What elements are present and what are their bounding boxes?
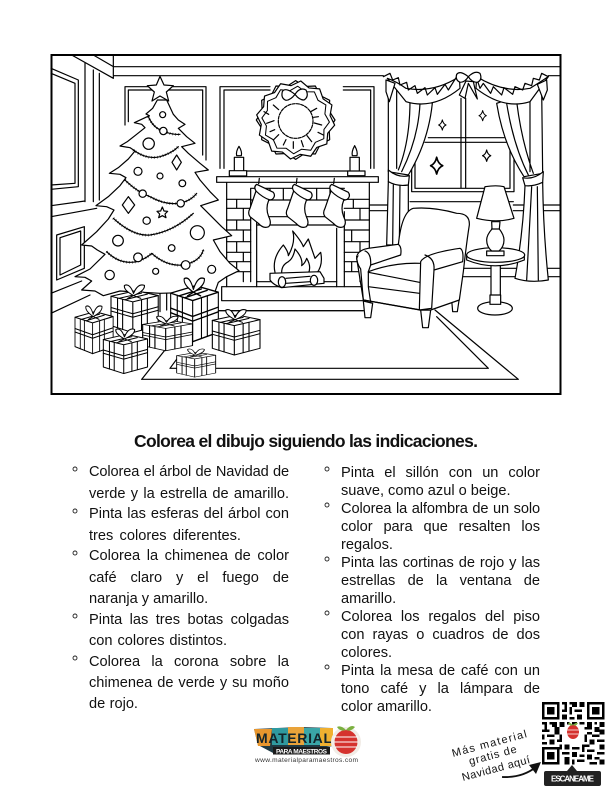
icon: apple <box>331 726 361 757</box>
instructions right column: Colorea los regalos del piso <box>341 609 540 625</box>
instructions right column: suave, como azul o beige. <box>341 483 511 499</box>
instructions right column: color amarillo. <box>341 699 432 715</box>
instructions right column: Colorea la alfombra de un solo <box>341 501 540 517</box>
rug <box>142 310 518 379</box>
illustration: Christmas living room <box>51 55 561 394</box>
callout: more material <box>451 728 541 784</box>
instructions left column: Pinta las tres botas colgadas <box>89 612 289 628</box>
instructions right column: colores. <box>341 645 392 661</box>
icon: fire and logs <box>270 231 324 288</box>
callout: more material: gratis de <box>468 744 518 768</box>
valance garland <box>383 72 548 104</box>
fireplace <box>217 146 378 311</box>
QR code <box>542 702 604 764</box>
instructions left column: de rojo. <box>89 696 138 712</box>
armchair <box>357 208 469 328</box>
instructions right column: tono café y la lámpara de <box>341 681 540 697</box>
instructions right column: color para que resalten los <box>341 519 540 535</box>
right half of room <box>357 72 548 328</box>
stockings <box>249 178 349 227</box>
ornaments <box>105 112 216 280</box>
logo: Material para Maestros <box>254 726 361 764</box>
instructions left column: Colorea la corona sobre la <box>89 654 289 670</box>
window <box>412 98 514 192</box>
wreath <box>252 76 340 164</box>
callout: more material: Más material <box>451 728 528 760</box>
instructions left column: con colores distintos. <box>89 633 227 649</box>
instructions left column: Colorea la chimenea de color <box>89 548 289 564</box>
instructions right column: estrellas de la ventana de <box>341 573 540 589</box>
gifts <box>75 278 260 377</box>
tree <box>75 76 239 312</box>
instructions left column: tres colores diferentes. <box>89 528 241 544</box>
instructions left column: Pinta las esferas del árbol con <box>89 506 289 522</box>
instructions right column: con rayas o cuadros de dos <box>341 627 540 643</box>
instructions left column: naranja y amarillo. <box>89 591 208 607</box>
instructions left column: chimenea de verde y su moño <box>89 675 289 691</box>
button: escanéame: ESCANEAME <box>551 774 595 784</box>
instructions left column: verde y la estrella de amarillo. <box>89 486 289 502</box>
tree star <box>147 76 173 101</box>
wall panels and moulding <box>51 55 560 313</box>
heading: Colorea el dibujo siguiendo las indicaciones. <box>134 431 478 451</box>
side table and lamp <box>467 186 525 315</box>
callout: more material: Navidad aquí <box>461 754 531 784</box>
icon: QR apple <box>567 723 579 739</box>
bullets left column <box>73 467 77 660</box>
logo: Material para Maestros: www.materialparamaestros.com <box>254 757 358 764</box>
button: escanéame <box>544 765 601 786</box>
instructions left column: café claro y el fuego de <box>89 570 289 586</box>
instructions right column: regalos. <box>341 537 393 553</box>
icon: wreath bow <box>282 89 307 100</box>
garlands <box>107 117 203 265</box>
instructions right column <box>341 465 540 715</box>
icon: candle left <box>229 146 247 176</box>
curtain right <box>497 88 548 281</box>
frame <box>52 55 560 394</box>
instructions right column: Pinta el sillón con un color <box>341 465 540 481</box>
instructions left column: Colorea el árbol de Navidad de <box>89 464 289 480</box>
instructions right column: Pinta las cortinas de rojo y las <box>341 555 540 571</box>
logo: Material para Maestros: PARA MAESTROS <box>276 748 328 755</box>
logo: Material para Maestros: MATERIAL <box>256 730 332 746</box>
icon: candle right <box>348 146 365 176</box>
curtain left <box>387 85 432 245</box>
arrow <box>502 762 541 777</box>
instructions left column <box>89 464 289 712</box>
instructions right column: Pinta la mesa de café con un <box>341 663 540 679</box>
instructions right column: amarillo. <box>341 591 396 607</box>
bullets right column <box>325 467 329 669</box>
